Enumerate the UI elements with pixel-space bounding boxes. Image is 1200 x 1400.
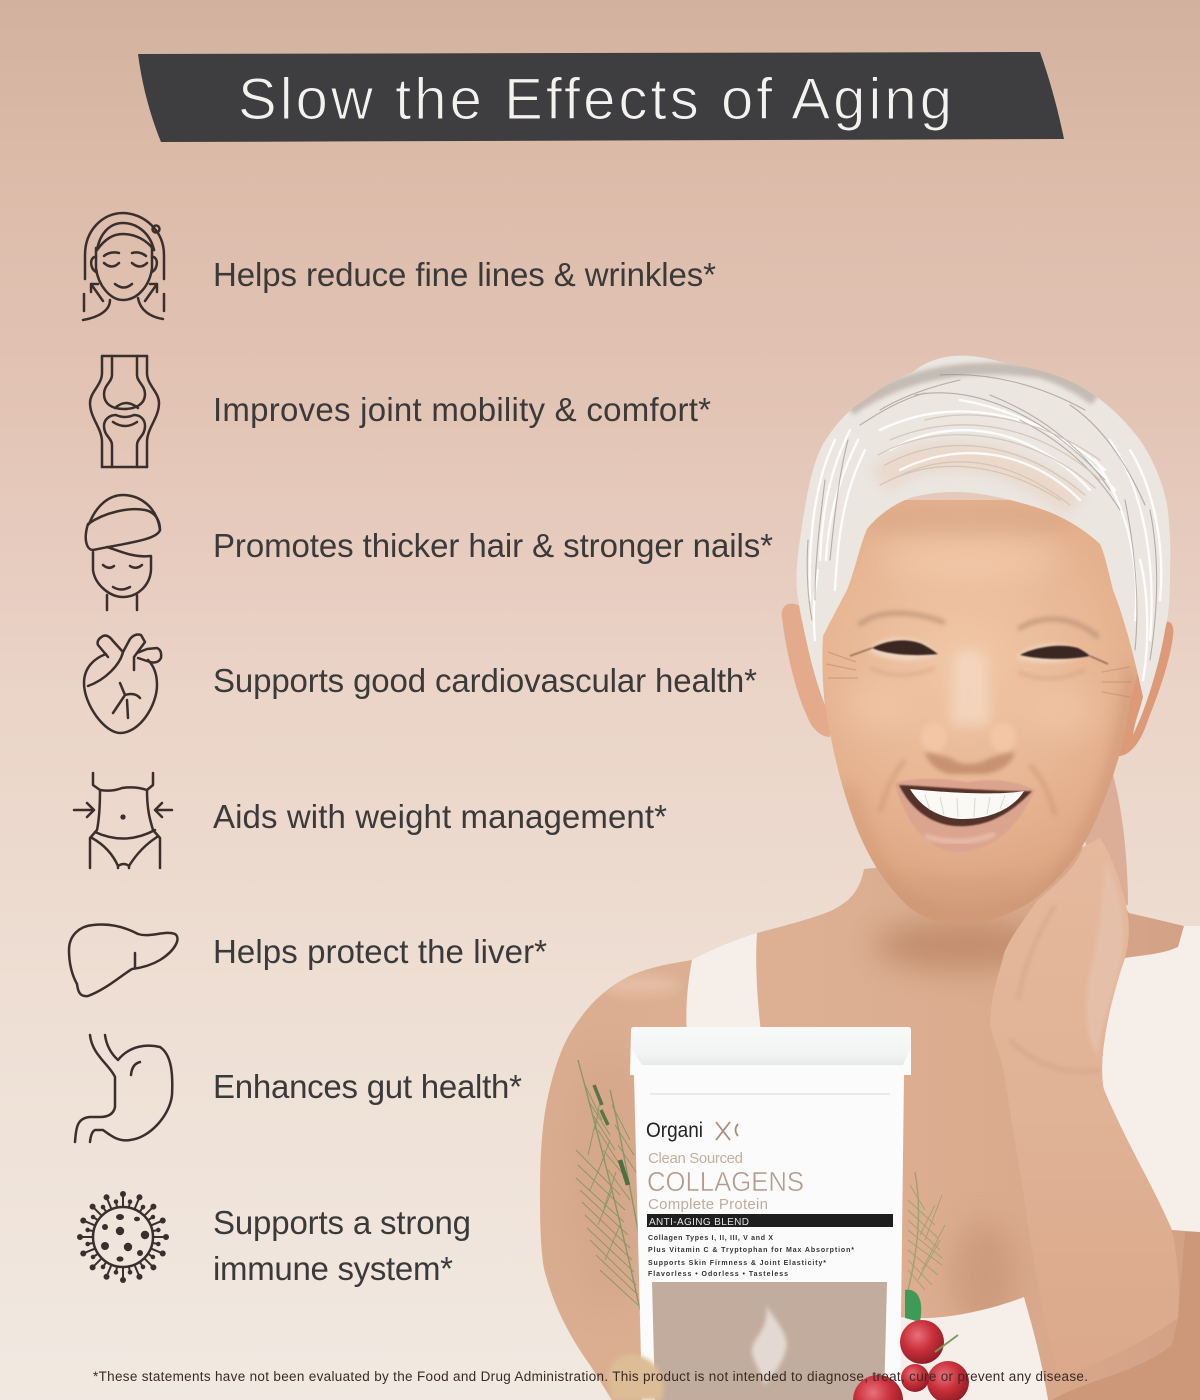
brand helix <box>716 1122 738 1140</box>
fingers behind neck <box>1085 760 1128 905</box>
benefit: cardiovascular health <box>84 634 757 733</box>
text: Improves joint mobility & comfort* <box>213 391 711 428</box>
claims: Supports Skin Firmness & Joint Elasticity* <box>648 1260 826 1267</box>
product name: Clean Sourced <box>648 1150 743 1167</box>
plant: right horsetail <box>908 1172 945 1290</box>
berries <box>853 1290 969 1400</box>
text: Helps reduce fine lines & wrinkles* <box>213 256 716 293</box>
benefit: immune system <box>77 1191 471 1287</box>
title text: Slow the Effects of Aging <box>238 67 952 132</box>
smile <box>895 779 1035 852</box>
benefit: joint mobility <box>90 356 711 467</box>
icon: waist <box>74 773 172 868</box>
crossing arm <box>1052 1232 1200 1400</box>
raised forearm and hand <box>990 838 1179 1378</box>
hand texture <box>1010 860 1123 1072</box>
eyebrows <box>860 613 1097 636</box>
plants <box>576 1060 945 1310</box>
icon: knee joint <box>90 356 159 467</box>
text: Supports a strong <box>213 1204 471 1241</box>
text <box>213 1204 471 1287</box>
benefit: fine lines and wrinkles <box>83 213 716 320</box>
text: Enhances gut health* <box>213 1068 522 1105</box>
benefit: liver <box>69 924 547 996</box>
helix logo <box>752 1305 787 1385</box>
icon: stomach <box>75 1035 172 1142</box>
footnote disclaimer: *These statements have not been evaluated by the Food and Drug Administration. This product is not intended to diagnose, treat, cure or prevent any disease. <box>93 1369 1088 1384</box>
product name <box>647 1150 804 1213</box>
torso and shoulders <box>540 847 1200 1400</box>
brand: Organi <box>646 1119 703 1142</box>
product name: Complete Protein <box>648 1196 768 1213</box>
icon: liver <box>69 924 177 996</box>
text: immune system* <box>213 1250 453 1287</box>
nose <box>921 651 1016 774</box>
icon: virus <box>77 1191 169 1283</box>
woman portrait <box>540 340 1200 1400</box>
text: Promotes thicker hair & stronger nails* <box>213 527 773 564</box>
ears <box>782 604 1173 756</box>
chest shading <box>565 919 1045 1330</box>
icon: head with towel <box>86 495 160 610</box>
benefit: weight management <box>74 773 667 868</box>
hair <box>796 356 1170 735</box>
text: Helps protect the liver* <box>213 933 547 970</box>
claims: Plus Vitamin C & Tryptophan for Max Absorption* <box>648 1247 854 1254</box>
ginger root <box>608 1354 663 1400</box>
powder window <box>652 1282 887 1400</box>
pouch body <box>630 1027 911 1400</box>
claims: Collagen Types I, II, III, V and X <box>648 1235 773 1242</box>
pouch flap <box>631 1027 911 1065</box>
product name: COLLAGENS <box>647 1166 804 1197</box>
icon: anatomical heart <box>84 634 161 733</box>
icon: face massage <box>83 213 164 320</box>
claims: Flavorless • Odorless • Tasteless <box>648 1271 788 1278</box>
face shading <box>826 514 1136 854</box>
plant: left horsetail <box>576 1060 640 1310</box>
benefit: hair and nails <box>86 495 773 610</box>
label bar: ANTI-AGING BLEND <box>649 1217 749 1228</box>
benefit: gut health <box>75 1035 522 1142</box>
label bar <box>647 1214 893 1228</box>
text: Aids with weight management* <box>213 798 667 835</box>
seal line <box>650 1093 890 1095</box>
text: Supports good cardiovascular health* <box>213 662 757 699</box>
claims <box>648 1235 854 1278</box>
product pouch <box>630 1027 911 1400</box>
white tank top <box>686 926 1200 1400</box>
face <box>820 500 1140 924</box>
eyes <box>850 638 1108 679</box>
title banner <box>138 52 1064 142</box>
